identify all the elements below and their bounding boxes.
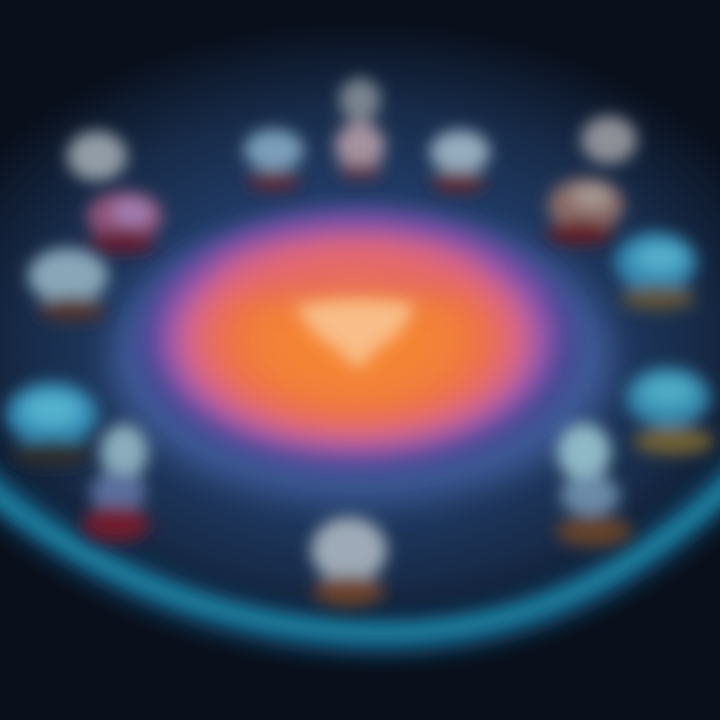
node: lower left cyan xyxy=(6,382,98,466)
ring: purple band xyxy=(155,214,559,458)
node: top centre xyxy=(335,78,385,180)
orange core xyxy=(165,228,545,452)
node: left grey-blue xyxy=(28,248,108,321)
node: lower right pillar xyxy=(556,423,632,547)
node: far upper right xyxy=(581,116,637,164)
node: far upper left xyxy=(67,131,127,181)
outer cyan arc xyxy=(0,440,720,636)
nodes xyxy=(6,78,714,606)
core shade xyxy=(220,244,480,300)
central hub rings xyxy=(112,213,612,500)
ring: blue halo xyxy=(112,216,612,500)
icon: glowing triangle xyxy=(296,299,414,367)
ring: indigo band xyxy=(136,213,580,473)
node: bottom centre xyxy=(311,517,387,606)
node: right cyan xyxy=(615,232,697,310)
node: pink left xyxy=(87,191,163,254)
node: lower right cyan xyxy=(626,367,714,455)
node: lower left pillar xyxy=(82,424,150,542)
node: upper right inner xyxy=(430,130,490,193)
node: upper left inner xyxy=(244,129,304,192)
node: copper right xyxy=(546,178,624,245)
